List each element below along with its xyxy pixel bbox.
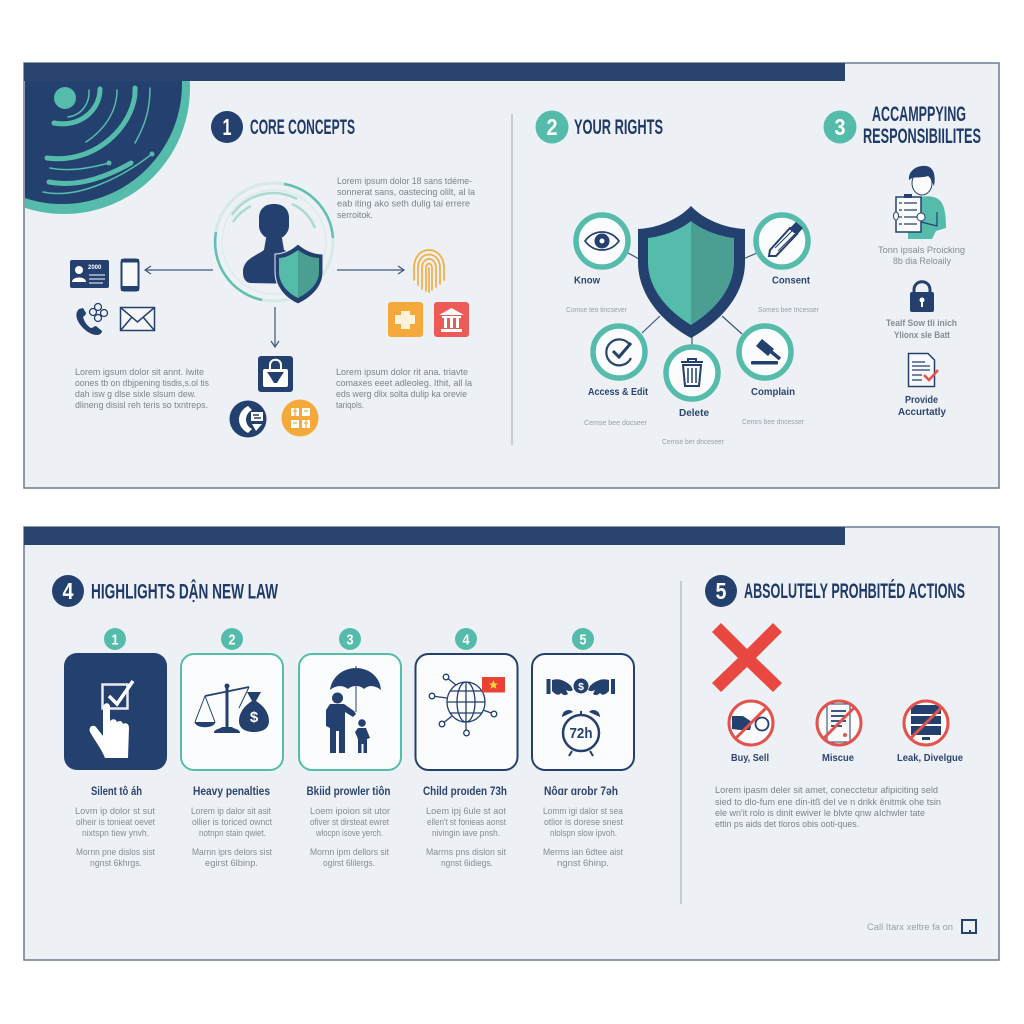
arrow: left: [145, 266, 213, 274]
icon: mobile phone: [121, 259, 139, 291]
text block: core concepts bottom left: [75, 367, 209, 411]
highlight column 4: [416, 628, 518, 868]
caption: access and edit: Cemse bee docseer: [584, 418, 647, 427]
label: access and edit: Access & Edit: [588, 386, 648, 398]
panel: top section: [23, 62, 1000, 489]
highlight column 3: wlocpn isove yerch.: [315, 828, 383, 838]
highlight column 4: ngnst 6idiegs.: [441, 858, 493, 868]
icon: locked case: [258, 356, 293, 392]
text block: prohibited actions: Lorem ipasm deler sit amet, conecctetur afipiciting seld: [715, 785, 938, 796]
highlight column 3: [299, 628, 401, 868]
text block: core concepts bottom left: dlineng disisl reh teris so txntreps.: [75, 400, 208, 411]
highlight column 4: nivingin iave pnsh.: [432, 828, 500, 838]
heading 1: core concepts: [211, 111, 355, 143]
label: consent: Consent: [772, 274, 810, 286]
prohibited: leak, divulge: [897, 701, 963, 764]
heading 4: highlights of new law: 4: [62, 578, 74, 604]
highlight column 1: olheir is tonieat oevet: [76, 817, 155, 827]
text block: core concepts bottom right: Lorem ipsum dolor rit ana. triavte: [336, 367, 468, 378]
icon: person with checklist: [894, 166, 946, 239]
caption: complain: Cemrs bee dncesser: [742, 417, 804, 426]
text block: prohibited actions: [715, 785, 941, 830]
heading 1: core concepts: 1: [222, 114, 232, 140]
label: know: Know: [574, 274, 601, 286]
label: delete: Delete: [679, 407, 709, 419]
text block: responsibility two: [886, 318, 957, 340]
icon: phone badge: [230, 400, 266, 438]
highlight column 5: Nôɑr ɑrobr 7ǝh: [544, 786, 618, 798]
highlight column 2: [181, 628, 283, 868]
heading 2: your rights: YOUR RIGHTS: [574, 116, 663, 139]
central shield: [638, 206, 745, 338]
icon: big red cross: [712, 623, 782, 692]
highlight column 2: 2: [228, 632, 236, 648]
text block: core concepts top right: [337, 176, 476, 221]
footer note: [867, 920, 976, 933]
text block: prohibited actions: ettin ps aids det tloros obis ooti-ques.: [715, 819, 859, 830]
text block: core concepts top right: Lorem ipsum dolor 18 sans tdéme-: [337, 176, 472, 187]
icon: telephone: [76, 304, 108, 335]
highlight column 2: egirst 6lbinp.: [205, 858, 258, 868]
icon: health cross tile: [388, 302, 423, 337]
right: delete: [666, 347, 718, 399]
arrow: right: [337, 266, 404, 274]
prohibited: buy, sell: Buy, Sell: [731, 752, 769, 764]
highlight column 3: ofiver st dirsteat ewret: [310, 817, 389, 827]
icon: scales and money bag: [194, 684, 269, 733]
highlight column 2: Marnn iprs delors sist: [192, 847, 272, 857]
highlight column 5: [532, 628, 634, 868]
highlight column 4: ellen't st fonieas aonst: [427, 817, 506, 827]
text block: core concepts bottom left: oones tb on dbjpening tisdis,s.ol tis: [75, 378, 209, 389]
highlight column 3: Loem ipoion sit utor: [310, 806, 390, 816]
highlight column 5: 5: [580, 632, 586, 648]
arrow: down: [271, 307, 279, 347]
caption: delete: Cemse ber dnceseer: [662, 437, 724, 446]
text block: responsibility one: [878, 245, 965, 266]
icon: checkbox and hand: [90, 681, 133, 758]
highlight column 5: Lomm igi dalor st sea: [543, 806, 624, 816]
icon: flag: [482, 677, 505, 692]
text block: core concepts bottom left: dah isw g dlse sixle slsum dew.: [75, 389, 196, 400]
icon: bank tile: [434, 302, 469, 337]
highlight column 5: Merms ian 6dtee aist: [543, 847, 623, 857]
highlight column 5: otlior is dorese snest: [544, 817, 623, 827]
highlight column 1: ngnst 6khrgs.: [90, 858, 142, 868]
text block: core concepts bottom left: Lorem igsum dolor sit annt. Iwite: [75, 367, 204, 378]
text block: core concepts top right: sonnerat sans, oastecing olilt, al la: [337, 187, 476, 198]
heading 5: absolutely prohibited actions: 5: [716, 578, 727, 604]
text block: core concepts bottom right: tariqols.: [336, 400, 364, 411]
rights diagram: [566, 206, 819, 446]
icon: handshake, coin and 72h clock: 72h: [570, 725, 592, 742]
text block: core concepts top right: serroitok.: [337, 210, 373, 221]
highlight column 1: [64, 628, 167, 868]
highlight column 1: nixtspn tiew ynvh.: [82, 828, 149, 838]
heading 1: core concepts: CORE CONCEPTS: [250, 116, 355, 139]
highlight column 2: Lorem ip dalor sit asit: [191, 806, 271, 816]
highlight column 1: Mornn pne dislos sist: [76, 847, 155, 857]
text block: prohibited actions: sied to dlo-fum ene din-itß del ve n drikk ënitmk ohe tsin: [715, 797, 941, 808]
highlight column 5: ngnst 6hinp.: [557, 858, 609, 868]
heading 4: highlights of new law: [52, 575, 278, 607]
label: complain: Complain: [751, 386, 795, 398]
icon: handshake, coin and 72h clock: $: [578, 681, 584, 693]
icon: id card: [70, 260, 109, 288]
panel: bottom section: [24, 527, 999, 960]
highlight column 1: Silent tô áh: [91, 786, 142, 798]
highlight column 2: ollier is toriced ownct: [192, 817, 272, 827]
icon: document with check: [908, 354, 938, 386]
text block: prohibited actions: ele wn'it rolo is dinit ewiver le blvte qnw aIchwler tate: [715, 808, 925, 819]
prohibited: buy, sell: [729, 701, 773, 764]
highlight column 4: 4: [462, 632, 470, 648]
right: complain: [739, 326, 791, 378]
text block: provide accurately: [898, 394, 946, 418]
highlight column 3: Bkiid prowler tiôn: [306, 786, 390, 798]
text block: core concepts bottom right: eds werg dlix solta dulip ka orevie: [336, 389, 467, 400]
highlight column 1: Lovm ip dolor st sut: [75, 806, 155, 816]
heading 3: accompanying responsibilities: 3: [834, 114, 846, 140]
text block: responsibility two: Tealf Sow tIi inich: [886, 318, 957, 328]
footer note: Call Itarx xeltre fa on: [867, 922, 953, 933]
prohibited: leak, divulge: Leak, Divelgue: [897, 752, 963, 764]
text block: provide accurately: Provide: [905, 394, 938, 406]
text block: provide accurately: Accurtatly: [898, 406, 946, 418]
prohibited: misuse: [817, 701, 861, 764]
right: access and edit: [593, 326, 645, 378]
heading 3: accompanying responsibilities: [824, 103, 981, 148]
icon: scales and money bag: $: [250, 709, 259, 726]
highlight column 1: 1: [112, 632, 118, 648]
prohibited: misuse: Miscue: [822, 752, 854, 764]
icon: globe network with flag: [429, 674, 497, 736]
icon: envelope: [120, 308, 154, 330]
heading 2: your rights: [536, 110, 663, 144]
icon: fingerprint: [414, 250, 444, 292]
caption: know: Comse teo tincsever: [566, 305, 627, 314]
text block: core concepts top right: eab iting ako seth dulig tai errere: [337, 198, 470, 210]
icon: id card: 2000: [88, 265, 102, 271]
highlight column 3: Mornn ipm dellors sit: [310, 847, 389, 857]
heading 2: your rights: 2: [546, 114, 558, 140]
icon: data badge: [282, 400, 318, 436]
text block: responsibility two: Ylionx sle Batt: [894, 330, 950, 340]
highlight column 3: 3: [346, 632, 354, 648]
highlight column 4: Marrns pns dislon sit: [426, 847, 506, 857]
decorative corner emblem: [25, 81, 190, 214]
caption: consent: Somes bee tncesser: [758, 305, 819, 314]
icon: handshake, coin and 72h clock: [546, 678, 615, 756]
icon: umbrella over adult and child: [326, 666, 381, 753]
highlight column 4: Loem ipj 6ule st aot: [426, 806, 506, 816]
highlight column 2: notnpn stain qwiet.: [199, 828, 266, 838]
highlight column 2: Heavy penalties: [193, 786, 270, 798]
text block: responsibility one: 8b dia Reloaily: [893, 256, 951, 266]
highlight column 4: Child proıden 73h: [423, 786, 507, 798]
highlight column 5: nlolspn slow ipvoh.: [550, 828, 617, 838]
heading 5: absolutely prohibited actions: [705, 575, 965, 607]
text block: responsibility one: Tonn ipsals Proicking: [878, 245, 965, 255]
right: consent: [756, 215, 808, 267]
highlight column 3: ogirst 6lilergs.: [323, 858, 375, 868]
text block: core concepts bottom right: comaxes eeet adleoleg. Ithit, all la: [336, 378, 473, 389]
icon: padlock: [910, 282, 934, 312]
right: know: [576, 215, 628, 267]
text block: core concepts bottom right: [336, 367, 473, 411]
heading 4: highlights of new law: HIGHLIGHTS DẬN NEW LAW: [91, 580, 278, 604]
icon: protected person: [215, 183, 333, 304]
